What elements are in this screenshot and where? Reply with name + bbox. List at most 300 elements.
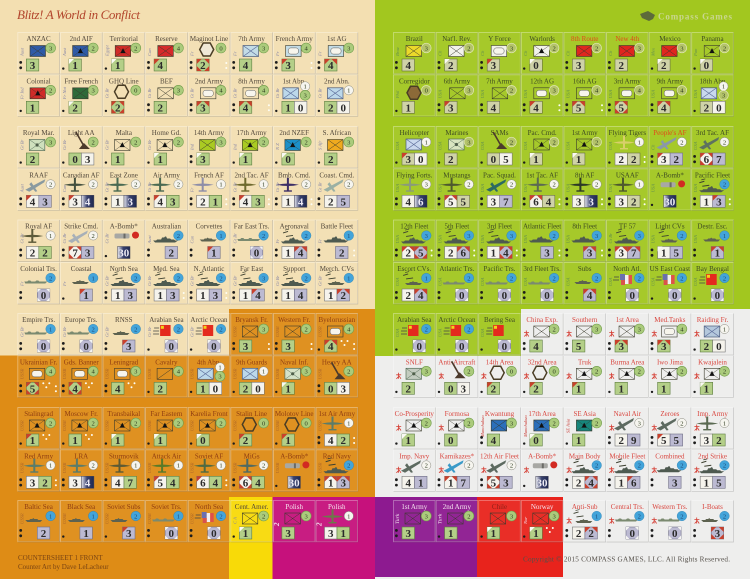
counter: Colonial: Colonial [27,77,51,85]
counter: 1st Tac. AF: USA [523,184,528,192]
counter: Australian: 2 [177,233,180,240]
counter: 16th AG: USA [565,90,570,98]
counter: Anti-Aircraft [436,356,478,397]
logo: Compass Games: Compass Games [658,12,732,22]
counter: Cavalry: 2 [158,383,164,395]
counter: 18th Abn: USA [693,90,698,98]
counter: Transbaikal: 2 [134,420,137,427]
counter: Europe Trs. [60,314,102,355]
counter: Warlords: 2 [552,45,556,52]
counter: 3rd Fleet Trs.: 3rd Fleet Trs. [523,265,561,273]
counter: Bmb. Cmd. [273,169,315,210]
counter: 12th Air Fleet: 2 [510,463,513,470]
counter: Pac. Squad.: 7 [503,196,509,208]
counter: Leningrad: Leningrad [109,358,139,366]
counter: Molotov Line: USSR [275,420,280,431]
counter: Atlantic Trs.: Atlantic Trs. [439,265,475,273]
counter: Burma Area: 2 [638,369,641,376]
counter: A-Bomb*: Gt Br [104,233,110,244]
counter: Air Army [146,169,187,210]
counter: Attack Air: USSR [147,462,152,473]
counter: Heavy AA: 3 [340,383,346,395]
counter: I-Boats [692,500,734,542]
counter: N. Atlantic [188,262,230,304]
counter: Arctic Ocean USA: 0 [459,341,465,353]
counter: Royal AF: 1 [49,233,52,240]
counter: 3rd Fleet Trs.: USA [523,277,528,286]
counter: Arctic Ocean [188,314,230,355]
counter: SAMs [479,126,520,168]
counter: Imp. Navy: 2 [425,463,428,470]
counter: Central Trs.: 2 [638,513,641,520]
counter: 1st AG [316,32,358,74]
counter: Cavalry [146,356,187,397]
counter: Attack Air: 5 [158,477,164,489]
counter: LRA: USSR [62,462,67,473]
counter: Moscow Fr.: 1 [72,435,78,447]
counter: 12th Fleet [394,220,435,262]
counter: Stalingrad: 1 [30,435,35,447]
counter: N. Atlantic: 2 [219,275,223,282]
counter: Naval Inf.: Naval Inf. [280,358,309,366]
counter: North Sea [103,262,145,304]
counter: Home Gd.: 1 [158,154,163,166]
counter: Zeroes: Zeroes [660,410,680,418]
counter: Arabian Sea: 2 [177,326,180,333]
counter: 1st Air Army: 1 [347,420,350,427]
counter: 2nd Abn.: 2 [328,102,334,114]
counter: Helicopter: 3 [405,154,411,166]
counter: Western Fr.: 2 [305,326,308,333]
counter: Soviet Subs: 3 [126,528,132,540]
counter: Far Eastern: Far Eastern [150,410,183,418]
counter: Combined: 3 [672,477,678,489]
counter: SE Asia: 1 [576,435,581,447]
counter: Med.Tanks: 4 [680,326,684,333]
counter: Heavy AA: 2 [347,369,350,376]
counter: Arabian Sea USA: 2 [425,326,428,333]
counter: USAAF [606,169,648,210]
counter: Canadian AF: 4 [85,196,91,208]
counter: A-Bomb* Soviet: USSR [275,462,280,473]
counter: SAMs: 5 [503,154,509,166]
counter: Med. Sea: 3 [170,290,176,302]
counter: Destr. Esc.: USA [693,235,698,244]
counter: Atlantic Trs. [436,262,478,304]
counter: 3rd Fleet Trs.: 2 [552,275,556,282]
counter: 8th AF: 2 [595,182,598,189]
counter: 9th Army [649,75,691,116]
counter: 8th Route: Ch [565,50,570,56]
sheet caption: Counter Art by Dave LeLacheur [18,563,109,571]
counter: Bay Bengal [692,262,734,304]
counter: Maginot Line [188,32,230,74]
counter: 18th Abn: 18th Abn [700,77,726,85]
counter: 17th Area: 0 [533,435,539,447]
counter: 7th Army [479,75,520,116]
counter: China Exp. [521,314,563,355]
counter: Cavalry: USSR [147,368,152,379]
counter: 2nd NZEF: 0 [285,154,291,166]
counter: 2nd Strike: 1 [704,477,709,489]
counter: 16th AG [564,75,606,116]
counter: 7th Army: 7th Army [486,77,513,85]
counter: 18th Abn: 3 [722,93,726,100]
counter: Pac. Squad.: USA [480,184,485,192]
counter: Support: 4 [298,290,304,302]
counter: Kamikazes*: Kamikazes* [440,452,475,460]
counter: 17th Area: 2 [552,420,556,427]
counter: N. Atlantic: 3 [213,290,219,302]
counter: Arctic Ocean USA: 2 [467,326,471,333]
counter: Brazil: Brazil [406,35,423,43]
counter: Bryansk Fr.: Bryansk Fr. [235,316,268,324]
counter: Flying Forts.: Flying Forts. [396,171,433,179]
counter: 2nd Army: 2nd Army [195,77,224,85]
counter: People's AF: Ch [651,144,656,150]
counter: Formosa [436,408,478,449]
counter: RAAF: RAAF [29,171,48,179]
counter: USAAF: USAAF [616,171,639,179]
counter: 8th Fleet: 3 [595,233,599,240]
counter: 32nd Area: 32nd Area [528,358,557,366]
background: tan British sheet [0,0,375,579]
counter: Molotov Line: Molotov Line [275,410,314,418]
counter: Polish infantry [273,500,315,542]
counter: Kwajalein [692,356,734,397]
counter: Colonial [18,75,60,116]
counter: Molotov Line [273,408,315,449]
counter: Corvettes: 1 [219,233,223,240]
counter: Western Fr.: Western Fr. [278,316,310,324]
counter: North Sea Soviet: USSR [190,513,195,524]
counter: Co-Prosperity: 1 [405,435,411,447]
counter: Polish air: 3 [328,528,334,540]
counter: Anti-Sub [564,500,606,542]
counter: 8th Route: 2 [595,45,598,52]
counter: Corregidor: 0 [425,88,429,95]
counter: Support: Gt Br [275,275,280,286]
counter: Med. Sea: Gt Br [147,275,152,286]
counter: Polish infantry: Polish [285,503,303,511]
counter: 18th Abn [692,75,734,116]
counter: Pacific Fleet: 3 [716,196,722,208]
counter: North Sea Soviet: North Sea [195,503,224,511]
counter: 2nd Strike: 5 [716,477,722,489]
counter: Colonial Trs.: 0 [41,290,47,302]
counter: S. African [316,126,358,168]
counter: Chile: 3 [510,513,514,520]
counter: Royal Mar. [18,126,60,168]
counter: Norway: 1 [533,528,539,540]
counter: LRA: 4 [85,477,91,489]
counter: Naval Inf.: USSR [275,368,280,379]
counter: 8th Route: 3 [576,60,582,72]
counter: Red Army: 1 [49,463,52,470]
counter: 3rd Tac. AF: USA [693,141,698,150]
counter: Bering Sea: 0 [502,341,508,353]
counter: Red Navy [316,450,358,491]
counter: 8th AF: 3 [576,196,582,208]
counter: Atlantic Fleet: 2 [552,233,556,240]
counter: A-Bomb* American: USA [651,184,656,192]
counter: Light CVs [649,220,691,262]
counter: Arctic Ocean USA [436,314,478,355]
counter: 14th Army: 3 [200,154,206,166]
counter: Iwo Jima: Iwo Jima [657,358,684,366]
counter: East Zone: 2 [134,182,137,189]
counter: MiGs [231,450,273,491]
counter: Transbaikal: Transbaikal [107,410,140,418]
counter: Kwantung: Manchukuo [480,415,485,438]
counter: 8th Fleet: 3 [587,248,593,260]
counter: 1st Army Turk [394,500,435,542]
counter: 2nd AIF [60,32,102,74]
counter: Empire Trs.: 1 [49,326,52,333]
counter: Ukrainian Fr.: 5 [30,383,36,395]
counter: Black Sea: Black Sea [67,503,96,511]
counter: Cent. Amer.: C A [232,517,237,524]
counter: A-Bomb* Japanese: A-Bomb* [528,452,557,460]
counter: Anti-Sub: 1 [595,513,598,520]
counter: 18th Abn: 2 [704,102,710,114]
counter: Med. Sea: 1 [158,290,163,302]
counter: RNSS: 2 [134,326,137,333]
counter: I-Boats: 2 [723,513,726,520]
counter: Colonial Trs.: Colonial Trs. [20,265,57,273]
counter: Flying Tigers: 2 [631,154,637,166]
counter: 17th Army: 17th Army [237,129,267,137]
counter: BEF: 2 [158,102,164,114]
counter: Home Gd.: 2 [177,139,180,146]
counter: Strike Cmd.: 3 [85,248,91,260]
counter: North Atl.: 2 [638,275,641,282]
counter: A-Bomb* American: 30 [664,196,676,208]
counter: Leningrad: 3 [134,369,138,376]
counter: Panama: 0 [704,60,710,72]
counter: Pac. Cmd.: 1 [533,154,539,166]
counter: Support: 1 [285,290,291,302]
counter: Cent. Amer. [231,500,273,542]
counter: Gds. Banner: 4 [92,369,96,376]
counter: People's AF: 3 [661,154,667,166]
counter: 1st Abn.: Gt Br [275,88,280,98]
counter: Western Trs.: 2 [680,513,684,520]
counter: Mexico: 2 [661,60,667,72]
counter: Coastal: 1 [83,290,89,302]
counter: Baltic Sea: 2 [41,528,47,540]
counter: Black Sea [60,500,102,542]
counter: Far East Trs.: Far East Trs. [234,222,270,230]
counter: SAMs: 2 [510,139,513,146]
counter: Kwantung: 3 [510,420,514,427]
counter: Burma Area [606,356,648,397]
counter: Soviet AF [188,450,230,491]
counter: Helicopter [394,126,435,168]
counter: Western Trs. [649,500,691,542]
counter: Colonial Trs.: Fr [19,281,24,287]
counter: Atlantic Trs.: 0 [459,290,465,302]
counter: Flying Forts.: 6 [418,196,424,208]
counter: 1st Air Army: 4 [328,435,334,447]
counter: 1st Army Turk: Turk [395,513,401,524]
counter: Corregidor: 1 [405,102,411,114]
counter: French AF: Fr [190,187,195,193]
counter: Malta: 2 [134,139,137,146]
counter: Arctic Ocean USA: Arctic Ocean [438,316,476,324]
counter: Aeronaval: 1 [285,248,291,260]
counter: Imp. Navy: 1 [418,477,423,489]
counter: Polish air: 1 [347,513,350,520]
counter: Baltic Sea [18,500,60,542]
counter: Brazil: Braz [395,47,400,56]
counter: Gds. Banner [60,356,102,397]
counter: 8th Fleet: 8th Fleet [572,222,597,230]
counter: 14th Area: 0 [510,369,514,376]
counter: North Sea: 2 [134,275,137,282]
counter: Flying Forts.: 3 [425,182,429,189]
counter: Europe Trs.: 2 [92,326,95,333]
counter: Colonial: 1 [30,102,35,114]
counter: S. African: S. African [323,129,351,137]
counter: Atlantic Fleet [521,220,563,262]
counter: Strike Cmd.: 7 [72,248,78,260]
counter: Coastal: Coastal [71,265,92,273]
counter: Coast. Cmd.: 5 [340,196,346,208]
counter: Battle Fleet: 2 [339,248,345,260]
counter: 1st Abn.: 0 [298,102,304,114]
counter: 17th Area: Manchukuo [523,415,528,438]
counter: MiGs: 4 [255,477,261,489]
counter: Moscow Fr.: Moscow Fr. [64,410,98,418]
counter: Corvettes: Corvettes [196,222,223,230]
counter: Reserve: 4 [177,45,181,52]
counter: Chile: Chile [492,503,507,511]
counter: Warlords: Warlords [529,35,555,43]
counter: New 4th: 2 [618,60,624,72]
counter: 2nd NZEF: 2nd NZEF [279,129,309,137]
counter: Karelia Front: 2 [219,420,223,427]
counter: Far East: 4 [255,290,261,302]
counter: BEF: 3 [177,88,181,95]
counter: Arabian Sea USA [394,314,435,355]
counter: GHQ Line [103,75,145,116]
counter: Brazil [394,32,435,74]
counter: Transbaikal: USSR [104,420,110,431]
counter: 14th Army [188,126,230,168]
counter: Pacific Fleet: 1 [704,196,709,208]
counter: 1st Abn.: 1 [285,102,291,114]
counter: Coastal: 1 [92,275,95,282]
counter: Helicopter: 0 [418,154,424,166]
counter: Norway: Nor [523,517,528,525]
counter: 3rd Fleet: USA [480,235,485,244]
counter: Pac. Squad.: 2 [510,182,513,189]
counter: Black Sea: 1 [83,528,89,540]
counter: 2nd Abn.: 1 [347,88,350,95]
panel: Polish, Turkish and Norwegian counters [273,500,563,542]
counter: A-Bomb* Soviet: A-Bomb* [280,452,309,460]
counter: Southern: 3 [595,326,599,333]
counter: Raiding Fr.: 0 [716,341,722,353]
counter: Heavy AA: Heavy AA [322,358,352,366]
counter: Reserve: Can [147,48,152,56]
sheet caption [18,554,109,571]
counter: Bay Bengal: 2 [723,275,726,282]
counter: Panama: Pan [693,48,698,57]
counter: Canadian AF: 2 [92,182,95,189]
counter: Stalin Line: Stalin Line [236,410,267,418]
counter: 2nd Strike [692,450,734,491]
counter: SAMs: 0 [491,154,497,166]
counter: Polish infantry: 3 [305,513,309,520]
counter: Battle Fleet [316,220,358,262]
counter: Reserve [146,32,187,74]
counter: TF 57: Gt Br [608,233,613,244]
background: red [477,497,563,577]
counter: Southern [564,314,606,355]
counter: 2nd Army Turk [436,500,478,542]
background: yellow [229,497,272,579]
counter: Leningrad [103,356,145,397]
counter: Polish air [316,500,358,542]
counter: Imp. Army: 1 [723,420,726,427]
counter: Strike Cmd.: Strike Cmd. [64,222,98,230]
counter: 8th AF: 8th AF [575,171,594,179]
counter: Corvettes [188,220,230,262]
counter: TF 57: TF 57 [619,222,636,230]
counter: Corvettes: 1 [211,248,217,260]
counter: Merch. CVs: 1 [328,290,333,302]
counter: Nat'l. Rev.: 2 [467,45,471,52]
counter: North Sea Soviet [188,500,230,542]
counter: Imp. Army [692,408,734,449]
counter: Cent. Amer.: 1 [243,528,248,540]
counter: Co-Prosperity: Co-Prosperity [395,410,434,418]
counter: US East Coast: US East Coast [650,265,690,273]
counter: Helicopter: 1 [425,139,428,146]
counter: BEF [146,75,187,116]
counter: 1st Army: 2 [595,139,598,146]
counter: Black Sea: USSR [62,513,67,524]
counter: ANZAC: Aust [19,47,24,57]
counter: 12th AG: 3 [552,88,556,95]
counter: 7th Army: 3 [262,45,266,52]
counter: Leningrad: 4 [115,383,121,395]
counter: Molotov Line: 1 [285,435,291,447]
counter: Raiding Fr.: Raiding Fr. [697,316,728,324]
counter: Anti-Sub: Anti-Sub [572,503,598,511]
counter: Arctic Ocean: Arctic Ocean [190,316,228,324]
counter: 12th Fleet: 2 [405,248,411,260]
counter: Air Army: 4 [158,196,164,208]
counter: Red Army: USSR [19,462,24,473]
counter: LRA: 3 [72,477,78,489]
counter: Royal AF: 2 [30,248,36,260]
counter: North Atl.: North Atl. [613,265,642,273]
counter: Strike Cmd.: Gt Br [62,233,67,244]
counter: Arabian Sea [146,314,187,355]
counter: Cavalry: Cavalry [155,358,178,366]
counter: Corregidor [394,75,435,116]
counter: 8th Route [564,32,606,74]
counter: 2nd NZEF: N Z [275,143,280,151]
counter: North Sea: North Sea [110,265,139,273]
counter: Escort CVs.: 1 [425,275,428,282]
counter: 2nd Tac. AF: 3 [255,196,261,208]
counter: Med. Sea: Med. Sea [153,265,181,273]
counter: N. Atlantic: 1 [200,290,206,302]
